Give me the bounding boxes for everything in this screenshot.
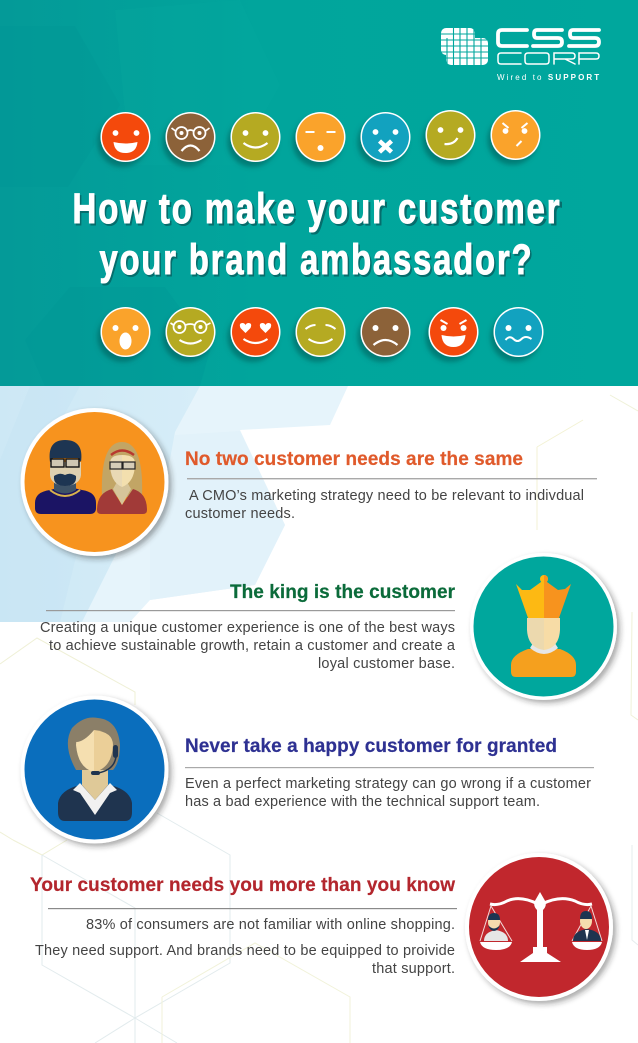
logo tagline: Wired to SUPPORT (497, 73, 601, 82)
hexagon outlines (0, 395, 638, 1043)
emoji row: bottom (100, 307, 544, 357)
light blue hexagon background (0, 386, 348, 622)
emoji: content (296, 307, 346, 357)
divider (187, 478, 597, 479)
emoji: evil laugh (428, 307, 478, 357)
icon: support agent (20, 696, 168, 844)
body text: They need support. And brands need to be equipped to proivide (35, 943, 455, 959)
panel: the king (40, 553, 617, 700)
panel: needs you more (30, 853, 613, 1001)
body text: that support. (372, 961, 455, 977)
body text (40, 620, 456, 672)
body text (185, 488, 584, 522)
body text: to achieve sustainable growth, retain a customer and create a (49, 638, 456, 654)
emoji: sad (360, 307, 410, 357)
emoji: smirk (426, 110, 476, 160)
emoji: laughing (100, 112, 150, 162)
body text: 83% of consumers are not familiar with online shopping. (86, 917, 455, 933)
emoji: heart eyes (230, 307, 280, 357)
heading: Never take a happy customer for granted (185, 736, 557, 757)
icon: king (470, 553, 617, 700)
heading: No two customer needs are the same (185, 449, 523, 470)
emoji: happy glasses (166, 307, 216, 357)
body text: Even a perfect marketing strategy can go wrong if a customer (185, 776, 591, 792)
body text: Creating a unique customer experience is one of the best ways (40, 620, 455, 636)
divider (185, 767, 594, 768)
body text: customer needs. (185, 506, 295, 522)
logo wordmark (498, 30, 599, 64)
icon: scale (465, 853, 613, 1001)
body text (185, 776, 591, 810)
body text: loyal customer base. (318, 656, 455, 672)
emoji: worried (494, 307, 544, 357)
panel: happy customer (20, 696, 594, 844)
emoji: muted (360, 112, 410, 162)
divider (48, 908, 457, 909)
emoji: surprised (100, 307, 150, 357)
body text: A CMO’s marketing strategy need to be relevant to indivdual (189, 488, 584, 504)
logo: CSS Corp (441, 28, 601, 82)
icon: couple (20, 408, 168, 556)
emoji: smile (230, 112, 280, 162)
panel: no two customers (20, 408, 597, 556)
title (72, 185, 564, 286)
teal header band (0, 0, 638, 386)
body text (35, 917, 455, 977)
heading: The king is the customer (230, 582, 456, 603)
logo grid mark (441, 28, 488, 65)
divider (46, 610, 455, 611)
emoji row: top (100, 110, 540, 162)
emoji: neutral (296, 112, 346, 162)
emoji: sad glasses (166, 112, 216, 162)
body text: has a bad experience with the technical support team. (185, 794, 540, 810)
emoji: annoyed (490, 110, 540, 160)
heading: Your customer needs you more than you know (30, 875, 455, 896)
